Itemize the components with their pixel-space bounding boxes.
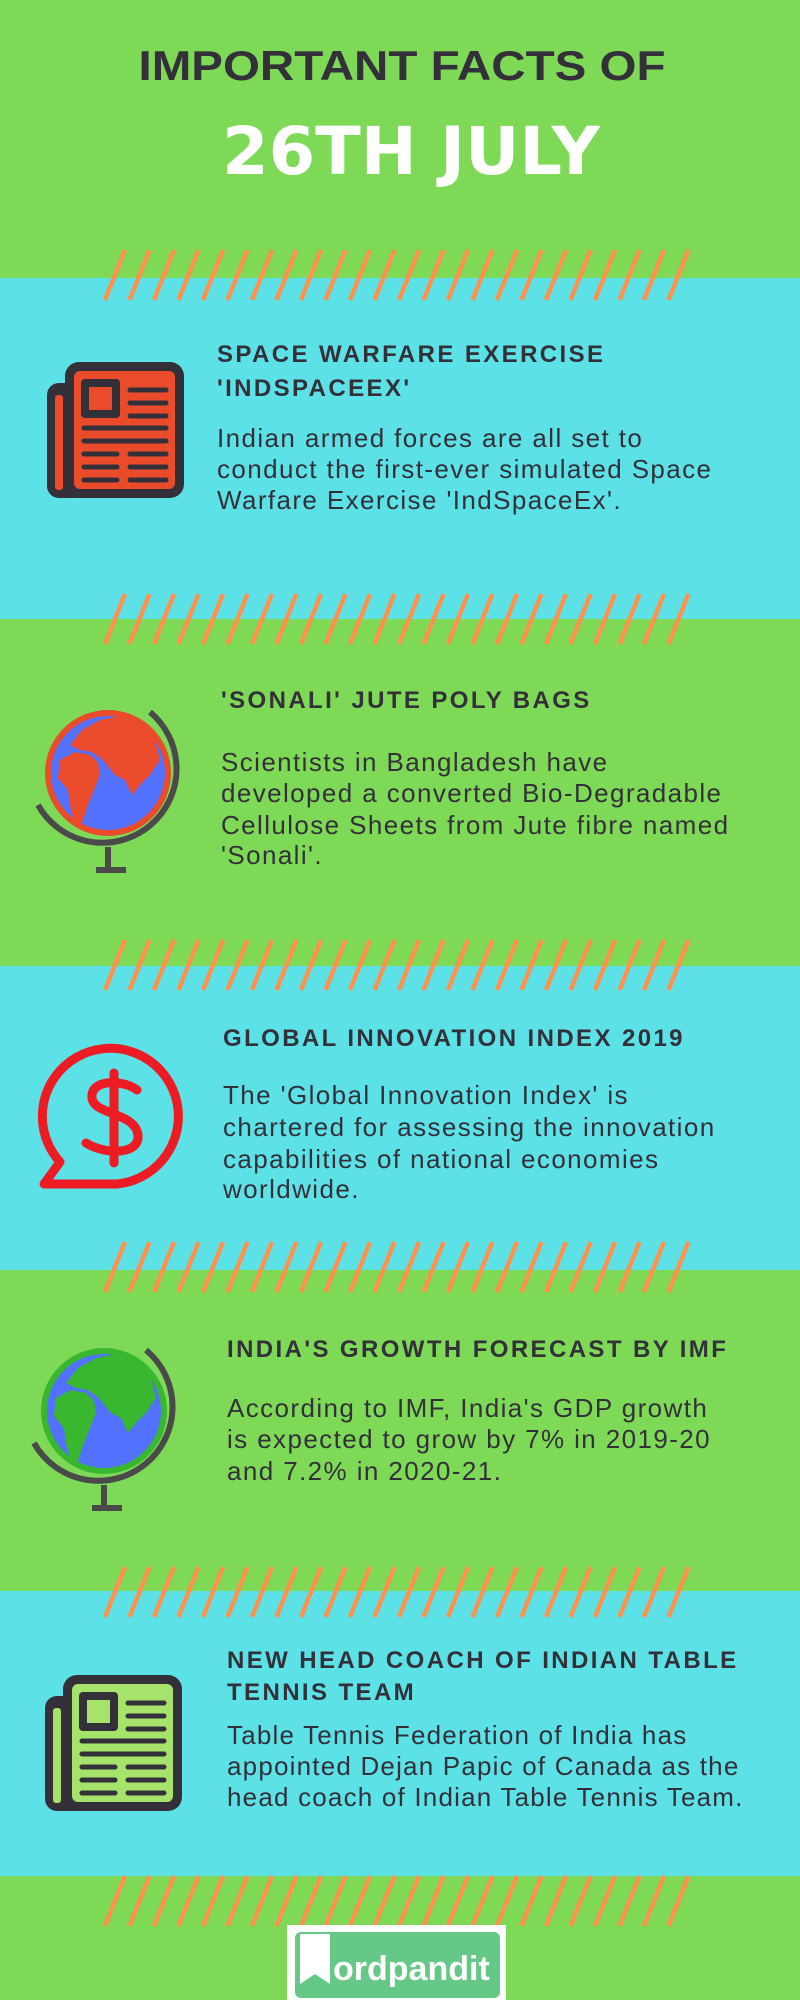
heading: head coach: NEW HEAD COACH OF INDIAN TABLE [227, 1647, 739, 1674]
body: sonali: 'Sonali'. [221, 840, 323, 870]
logo: wordpandit: ordpandit [333, 1950, 490, 1988]
title [138, 42, 666, 190]
heading: space warfare: SPACE WARFARE EXERCISE [217, 341, 605, 368]
body: innovation index: capabilities of national economies [223, 1144, 659, 1174]
heading: growth forecast: INDIA'S GROWTH FORECAST BY IMF [227, 1336, 728, 1363]
body: space warfare: Indian armed forces are all set to [217, 423, 643, 453]
body: space warfare: conduct the first-ever simulated Space [217, 454, 712, 484]
body: sonali: Cellulose Sheets from Jute fibre named [221, 810, 729, 840]
body: sonali: developed a converted Bio-Degradable [221, 778, 722, 808]
title: IMPORTANT FACTS OF [138, 42, 666, 89]
body: growth forecast: is expected to grow by 7% in 2019-20 [227, 1424, 711, 1454]
title: 26TH JULY [222, 113, 601, 190]
heading: head coach: TENNIS TEAM [227, 1679, 416, 1706]
body: innovation index: The 'Global Innovation Index' is [223, 1080, 629, 1110]
icon: newspaper green [45, 1675, 182, 1811]
body: head coach: Table Tennis Federation of India has [227, 1720, 687, 1750]
heading: space warfare: 'INDSPACEEX' [217, 375, 411, 402]
body: growth forecast: According to IMF, India's GDP growth [227, 1393, 708, 1423]
icon: globe red [38, 710, 177, 873]
icon: globe green [34, 1348, 173, 1511]
icon: dollar bubble [42, 1048, 178, 1184]
body: innovation index: chartered for assessing the innovation [223, 1112, 716, 1142]
body: head coach: appointed Dejan Papic of Canada as the [227, 1751, 740, 1781]
body: space warfare: Warfare Exercise 'IndSpaceEx'. [217, 485, 622, 515]
heading: sonali: 'SONALI' JUTE POLY BAGS [221, 687, 592, 714]
body: innovation index: worldwide. [222, 1174, 360, 1204]
body: head coach: head coach of Indian Table Tennis Team. [227, 1782, 744, 1812]
body: growth forecast: and 7.2% in 2020-21. [227, 1456, 502, 1486]
icon: newspaper red [47, 362, 184, 498]
logo: wordpandit [287, 1925, 506, 2000]
body: sonali: Scientists in Bangladesh have [221, 747, 608, 777]
heading: innovation index: GLOBAL INNOVATION INDEX 2019 [223, 1025, 685, 1052]
